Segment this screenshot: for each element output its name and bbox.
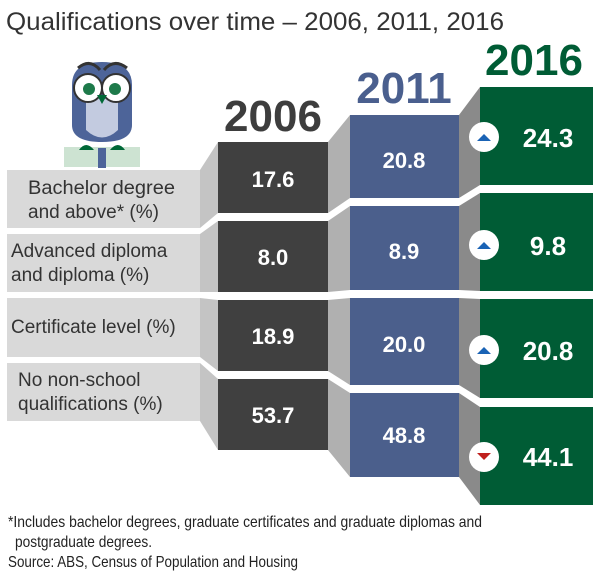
column: 2016: 20.8 <box>523 336 573 366</box>
column: 2011: 8.9 <box>389 239 419 264</box>
column: 2011: 2011 <box>356 64 452 113</box>
column: 2006: 18.9 <box>252 324 294 349</box>
labels <box>7 170 200 421</box>
column: 2016: 2016 <box>485 36 583 85</box>
side faces <box>200 87 480 505</box>
column: 2016: 24.3 <box>523 123 573 153</box>
footnote: *Includes bachelor degrees, graduate certificates and graduate diplomas and <box>8 514 482 531</box>
column: 2011: 20.0 <box>383 332 425 357</box>
column: 2006: 8.0 <box>258 245 288 270</box>
column: 2011: 20.8 <box>383 148 425 173</box>
labels: and above* (%) <box>28 202 159 223</box>
column: 2006 <box>218 92 328 450</box>
icon: owl <box>64 62 140 168</box>
labels: No non-school <box>18 370 141 391</box>
labels: qualifications (%) <box>18 394 163 415</box>
labels: Advanced diploma <box>11 241 168 262</box>
column: 2011 <box>350 64 459 477</box>
labels: and diploma (%) <box>11 265 149 286</box>
column: 2006: 2006 <box>224 92 322 141</box>
footnote <box>8 514 482 571</box>
labels: Bachelor degree <box>28 178 175 199</box>
column: 2016 <box>480 36 593 505</box>
column: 2016: 9.8 <box>530 231 566 261</box>
footnote: postgraduate degrees. <box>15 534 152 551</box>
title: Qualifications over time – 2006, 2011, 2016 <box>6 8 504 36</box>
icons: change arrows <box>469 122 499 472</box>
column: 2006: 53.7 <box>252 403 294 428</box>
column: 2006: 17.6 <box>252 167 294 192</box>
labels: Certificate level (%) <box>11 317 176 338</box>
column: 2011: 48.8 <box>383 423 425 448</box>
column: 2016: 44.1 <box>523 442 573 472</box>
footnote: Source: ABS, Census of Population and Housing <box>8 554 298 571</box>
